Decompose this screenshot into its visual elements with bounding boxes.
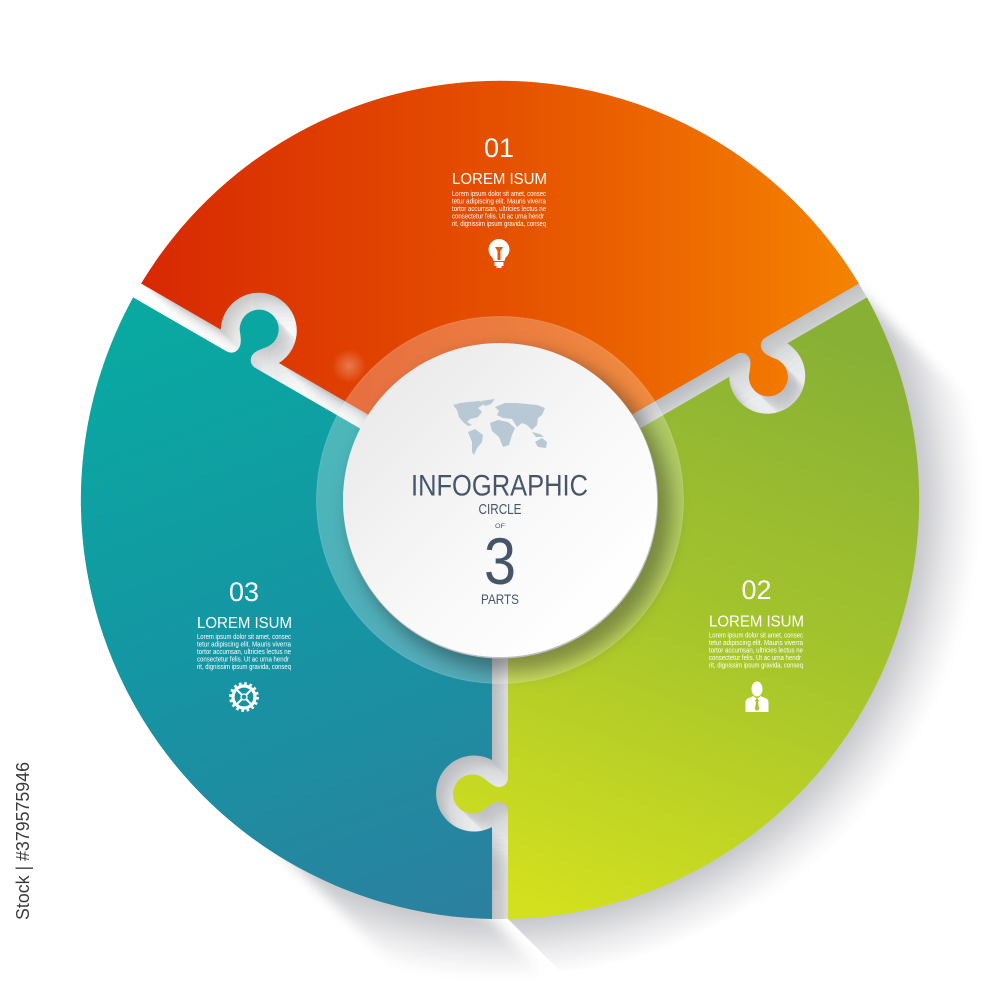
gap background disc xyxy=(81,81,919,919)
panel text: 02: LOREM ISUM xyxy=(709,614,804,630)
long shadow: right segment xyxy=(600,290,1000,1000)
centre text block: 3 xyxy=(484,524,516,598)
panel text: 02: rit, dignissim ipsum gravida, conseq xyxy=(709,662,803,670)
panel text: 02: tetur adipiscing elit. Mauris viverra xyxy=(709,640,803,647)
centre disc soft shadow xyxy=(350,350,672,672)
long shadow: lower-left segment xyxy=(240,810,570,1000)
icon: world map xyxy=(453,399,547,455)
panel text: 02 xyxy=(709,575,804,670)
panel text: 01: 01 xyxy=(484,133,514,163)
centre text block: CIRCLE xyxy=(478,502,522,518)
panel text: 01: Lorem ipsum dolor sit amet, consec xyxy=(452,191,546,198)
puzzle piece: 02 green xyxy=(453,297,919,919)
centre text block: INFOGRAPHIC xyxy=(411,470,588,502)
panel text: 01: consectetur felis. Ut ac urna hendr xyxy=(452,214,545,220)
ring glint xyxy=(332,349,366,383)
puzzle piece: 01 orange xyxy=(115,0,886,642)
panel text: 02: consectetur felis. Ut ac urna hendr xyxy=(709,655,802,662)
panel text: 01: tortor accumsan, ultricies lectus ne xyxy=(452,206,546,213)
panel text: 01: tetur adipiscing elit. Mauris viverra xyxy=(452,198,546,206)
panel text: 02: Lorem ipsum dolor sit amet, consec xyxy=(709,632,803,640)
centre text block xyxy=(411,470,588,607)
panel text: 01: LOREM ISUM xyxy=(452,171,547,188)
panel text: 03 xyxy=(197,577,292,671)
panel text: 03: consectetur felis. Ut ac urna hendr xyxy=(197,656,290,664)
centre disc edge shadow xyxy=(343,344,658,658)
icon: light bulb xyxy=(489,239,509,268)
panel text: 03: tetur adipiscing elit. Mauris viverra xyxy=(197,642,291,648)
panel text: 01: rit, dignissim ipsum gravida, conseq xyxy=(452,221,546,228)
centre text block: PARTS xyxy=(481,591,519,607)
puzzle piece: 03 teal xyxy=(0,250,699,964)
panel text: 02: tortor accumsan, ultricies lectus ne xyxy=(709,648,803,654)
panel text: 02: 02 xyxy=(742,575,772,605)
panel text: 01 xyxy=(452,133,547,228)
icon: businessman xyxy=(746,682,768,712)
stock reference text: Stock | #379575946 xyxy=(12,762,33,920)
panel text: 03: Lorem ipsum dolor sit amet, consec xyxy=(197,634,291,641)
centre disc xyxy=(343,343,657,657)
glass ring around centre xyxy=(316,316,684,684)
panel text: 03: tortor accumsan, ultricies lectus ne xyxy=(197,649,291,656)
centre text block: OF xyxy=(495,523,505,530)
panel text: 03: LOREM ISUM xyxy=(197,615,292,632)
long shadow: bottom segment xyxy=(508,830,760,1000)
panel text: 03: 03 xyxy=(229,577,259,607)
icon: gear xyxy=(230,684,258,710)
gap shadows cast by the puzzle pieces xyxy=(146,256,866,919)
panel text: 03: rit, dignissim ipsum gravida, conseq xyxy=(197,664,291,671)
